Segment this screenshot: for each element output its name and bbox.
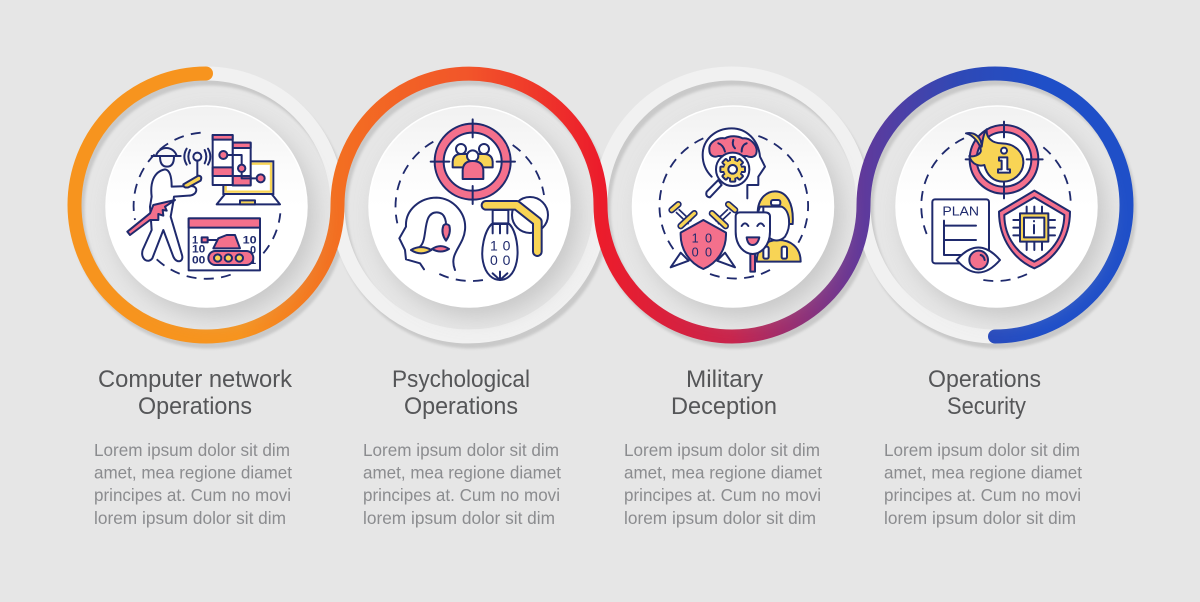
panel: operations security [884, 106, 1105, 528]
icon: soldier, devices and tank: 10 [243, 234, 257, 246]
heading: operations security: Operations [928, 366, 1041, 393]
icon: soldier, devices and tank: 1 [250, 255, 256, 267]
heading: computer network operations [98, 366, 293, 420]
icon: brain, shield, mask and soldier: 0 [705, 246, 712, 260]
text block 2: principes at. Cum no movi [363, 485, 560, 505]
icon: brain, shield, mask and soldier: 0 [692, 246, 699, 260]
icon: soldier, devices and tank: 00 [192, 254, 205, 266]
text block 1: lorem ipsum dolor sit dim [94, 508, 286, 528]
heading: computer network operations: Computer network [98, 366, 293, 393]
text block 1: Lorem ipsum dolor sit dim [94, 440, 290, 460]
text block 2: amet, mea regione diamet [363, 462, 561, 482]
text block 3: Lorem ipsum dolor sit dim [624, 440, 820, 460]
icon: burning info target, plan, eye and shield: PLAN [942, 205, 979, 219]
heading: military deception: Deception [671, 393, 777, 420]
icon: brain, shield, mask and soldier [659, 128, 808, 279]
icon: soldier, devices and tank: 10 [192, 244, 205, 256]
text block 2: lorem ipsum dolor sit dim [363, 508, 555, 528]
text block 3: lorem ipsum dolor sit dim [624, 508, 816, 528]
heading: computer network operations: Operations [138, 393, 252, 420]
text block 1: amet, mea regione diamet [94, 462, 292, 482]
text block 3 [624, 440, 822, 528]
icon: soldier, devices and tank: 1 [192, 234, 198, 246]
text block 4: principes at. Cum no movi [884, 485, 1081, 505]
icon: brain, shield, mask and soldier: 0 [705, 232, 712, 246]
text block 4: lorem ipsum dolor sit dim [884, 508, 1076, 528]
heading: psychological operations [392, 366, 530, 420]
icon: target, head and grenade: 0 [490, 252, 498, 268]
text block 4: Lorem ipsum dolor sit dim [884, 440, 1080, 460]
icon: soldier, devices and tank: 0 [250, 244, 256, 256]
light track [206, 74, 995, 336]
heading: psychological operations: Psychological [392, 366, 530, 393]
text block 3: amet, mea regione diamet [624, 462, 822, 482]
heading: military deception [671, 366, 777, 420]
disc 1 [106, 106, 315, 317]
panel: computer network operations [94, 106, 315, 528]
text block 4 [884, 440, 1082, 528]
icon: burning info target, plan, eye and shield [921, 122, 1071, 281]
icon: brain, shield, mask and soldier: 1 [692, 232, 699, 246]
text block 1: principes at. Cum no movi [94, 485, 291, 505]
panel: psychological operations [363, 106, 578, 528]
icon: target, head and grenade [395, 119, 548, 281]
heading: operations security [928, 366, 1041, 420]
disc 3 [632, 106, 842, 317]
heading: psychological operations: Operations [404, 393, 518, 420]
text block 4: amet, mea regione diamet [884, 462, 1082, 482]
text block 2: Lorem ipsum dolor sit dim [363, 440, 559, 460]
heading: operations security: Security [947, 393, 1026, 420]
heading: military deception: Military [686, 366, 763, 393]
disc 4 [896, 106, 1105, 317]
text block 2 [363, 440, 561, 528]
icon: target, head and grenade: 0 [503, 238, 511, 254]
icon: target, head and grenade: 0 [503, 252, 511, 268]
gradient loop line [75, 74, 1127, 336]
text block 3: principes at. Cum no movi [624, 485, 821, 505]
ring shadows [78, 78, 1130, 342]
icon: target, head and grenade: 1 [490, 238, 498, 254]
text block 1 [94, 440, 292, 528]
panel: military deception [624, 106, 842, 528]
disc 2 [369, 106, 578, 317]
icon: soldier, devices and tank [127, 133, 280, 279]
